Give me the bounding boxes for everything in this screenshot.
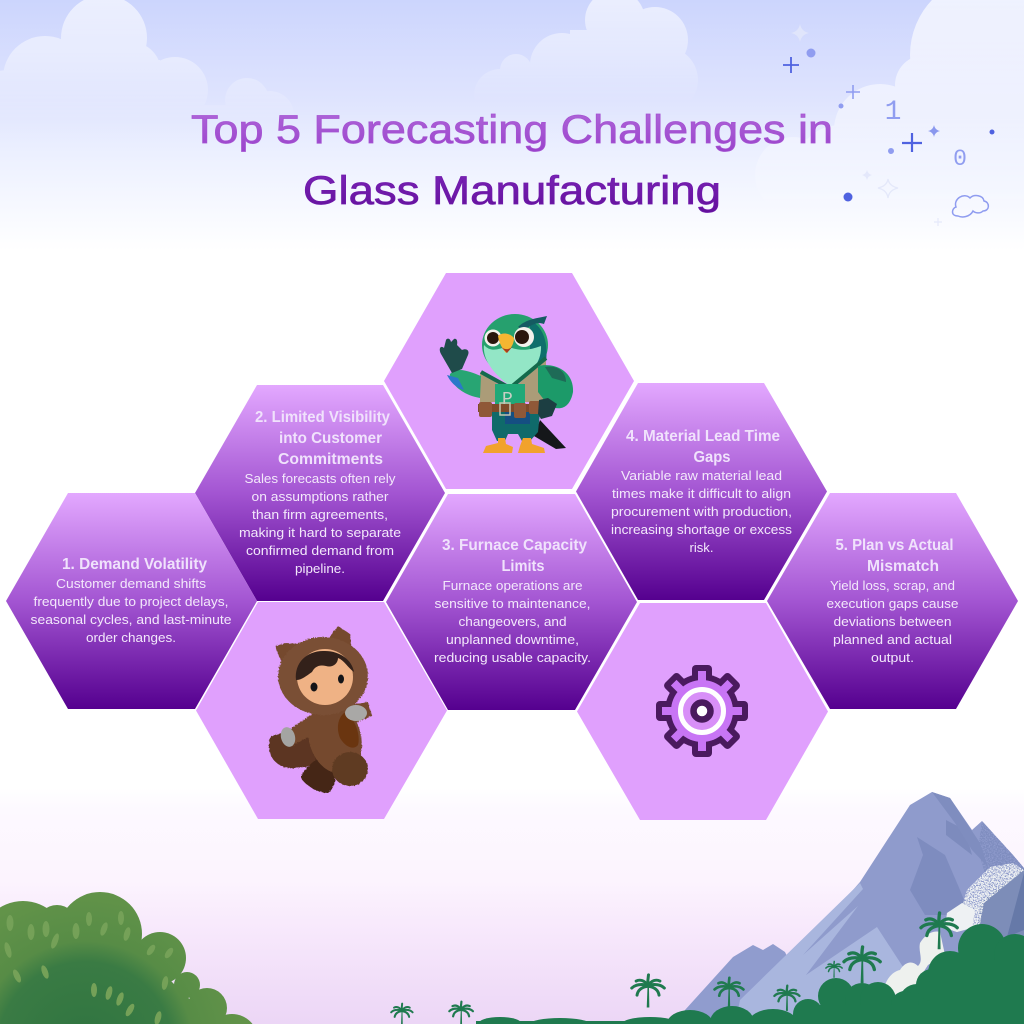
cloud: top right <box>818 0 1024 132</box>
text: challenge 2 description: making it hard to separate <box>239 525 401 540</box>
sparkle and binary decorations: 1 <box>885 97 901 128</box>
heading: challenge 3: 3. Furnace Capacity <box>442 537 587 554</box>
text: challenge 2 description: on assumptions rather <box>252 489 389 504</box>
text: challenge 5 description: output. <box>871 650 914 665</box>
heading: challenge 4: 4. Material Lead Time <box>626 428 780 445</box>
text: challenge 4 description: risk. <box>690 540 714 555</box>
icon: gear <box>656 665 748 757</box>
panel: mascot bird hexagon <box>384 273 634 489</box>
text: challenge 2 description <box>239 471 401 576</box>
heading: challenge 5: Mismatch <box>867 558 939 575</box>
icon: brown bear-suit mascot <box>269 626 372 793</box>
panel: gear hexagon <box>577 603 828 820</box>
text: challenge 2 description: Sales forecasts often rely <box>244 471 396 486</box>
panel: 4. Material Lead Time Gaps <box>576 383 827 600</box>
heading: challenge 1: 1. Demand Volatility <box>62 556 207 573</box>
text: challenge 1 description: order changes. <box>86 630 176 645</box>
text: challenge 4 description: Variable raw material lead <box>621 468 782 483</box>
heading: challenge 2: Commitments <box>278 451 383 468</box>
text: challenge 5 description: deviations between <box>834 614 952 629</box>
heading: challenge 5: 5. Plan vs Actual <box>836 537 954 554</box>
text: challenge 2 description: pipeline. <box>295 561 345 576</box>
text: challenge 5 description: Yield loss, scrap, and <box>830 578 955 593</box>
sparkle and binary decorations: 0 <box>953 146 967 172</box>
text: challenge 4 description: procurement with production, <box>611 504 792 519</box>
text: challenge 3 description: unplanned downtime, <box>446 632 579 647</box>
text: challenge 3 description: Furnace operations are <box>442 578 582 593</box>
text: challenge 5 description <box>826 578 958 665</box>
panel: 2. Limited Visibility into Customer Commitments <box>195 385 445 601</box>
panel: 1. Demand Volatility <box>6 493 257 709</box>
text: challenge 1 description: Customer demand shifts <box>56 576 207 591</box>
text: challenge 3 description: changeovers, and <box>458 614 566 629</box>
heading: challenge 4 <box>626 428 780 466</box>
cloud: top left <box>0 0 260 84</box>
title <box>191 108 833 213</box>
bush: left foreground <box>0 892 258 1024</box>
heading: challenge 3: Limits <box>502 558 544 575</box>
text: challenge 2 description: confirmed demand from <box>246 543 394 558</box>
heading: challenge 4: Gaps <box>694 449 730 466</box>
title: Glass Manufacturing <box>303 169 721 213</box>
text: challenge 1 description: seasonal cycles, and last-minute <box>30 612 231 627</box>
heading: challenge 5 <box>836 537 954 575</box>
text: challenge 4 description: times make it difficult to align <box>612 486 791 501</box>
text: challenge 2 description: than firm agreements, <box>252 507 388 522</box>
heading: challenge 3 <box>442 537 587 575</box>
heading: challenge 2 <box>255 409 390 468</box>
icon: green bird mascot waving <box>440 314 573 453</box>
panel: 3. Furnace Capacity Limits <box>386 494 637 710</box>
panel: 5. Plan vs Actual Mismatch <box>767 493 1018 709</box>
sparkle and binary decorations <box>783 24 994 226</box>
text: challenge 5 description: execution gaps cause <box>826 596 958 611</box>
text: challenge 1 description <box>30 576 231 645</box>
text: challenge 4 description <box>611 468 793 555</box>
text: challenge 1 description: frequently due to project delays, <box>34 594 228 609</box>
icon: green bird mascot waving: P <box>502 390 513 410</box>
heading: challenge 2: 2. Limited Visibility <box>255 409 390 426</box>
cloud: top centre <box>500 0 696 68</box>
panel: mascot bear hexagon <box>196 602 447 819</box>
heading: challenge 2: into Customer <box>279 430 382 447</box>
mountains <box>675 792 1024 1024</box>
text: challenge 4 description: increasing shortage or excess <box>611 522 793 537</box>
green foreground hills with palm trees <box>391 913 1024 1024</box>
title: Top 5 Forecasting Challenges in <box>191 108 833 152</box>
text: challenge 5 description: planned and actual <box>833 632 952 647</box>
text: challenge 3 description: sensitive to maintenance, <box>434 596 590 611</box>
text: challenge 3 description <box>434 578 591 665</box>
text: challenge 3 description: reducing usable capacity. <box>434 650 591 665</box>
